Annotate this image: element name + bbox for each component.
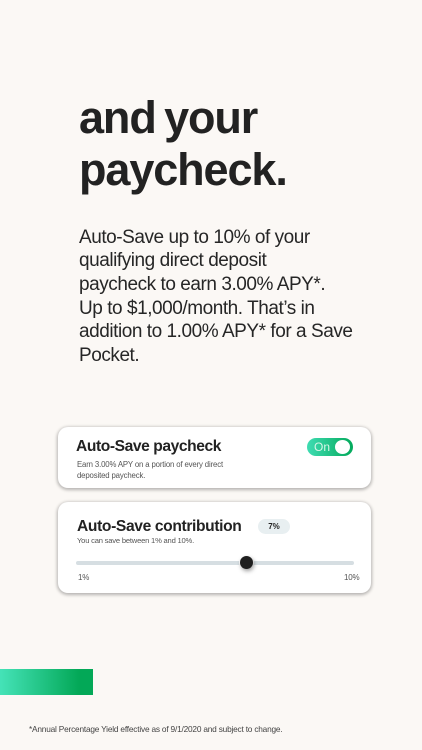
slider max label: 10%	[344, 573, 359, 582]
body paragraph: addition to 1.00% APY* for a Save	[79, 321, 353, 342]
panel description: You can save between 1% and 10%.	[77, 536, 194, 545]
body paragraph	[79, 226, 353, 366]
toggle label: On	[314, 440, 330, 454]
heading	[79, 92, 287, 195]
body paragraph: paycheck to earn 3.00% APY*.	[79, 274, 325, 295]
panel heading: Auto-Save paycheck	[76, 438, 221, 455]
body paragraph: Pocket.	[79, 345, 139, 366]
value pill: 7%	[268, 522, 280, 531]
heading: and your	[79, 92, 257, 143]
slider track	[76, 561, 354, 565]
body paragraph: qualifying direct deposit	[79, 250, 266, 271]
slider knob	[240, 556, 253, 569]
panel: auto-save contribution	[58, 502, 371, 593]
panel heading: Auto-Save contribution	[77, 518, 241, 535]
panel description	[77, 460, 224, 480]
panel description: Earn 3.00% APY on a portion of every direct	[77, 460, 223, 469]
toggle knob	[335, 440, 350, 454]
panel: auto-save paycheck	[58, 427, 371, 488]
value pill	[258, 519, 290, 534]
body paragraph: Auto-Save up to 10% of your	[79, 226, 310, 248]
green gradient bar	[0, 669, 93, 695]
panel description: deposited paycheck.	[77, 470, 145, 480]
toggle switch	[307, 438, 353, 456]
slider min label: 1%	[78, 573, 89, 582]
body paragraph: Up to $1,000/month. That’s in	[79, 298, 315, 319]
heading: paycheck.	[79, 144, 287, 195]
footnote: *Annual Percentage Yield effective as of 9/1/2020 and subject to change.	[29, 724, 282, 734]
